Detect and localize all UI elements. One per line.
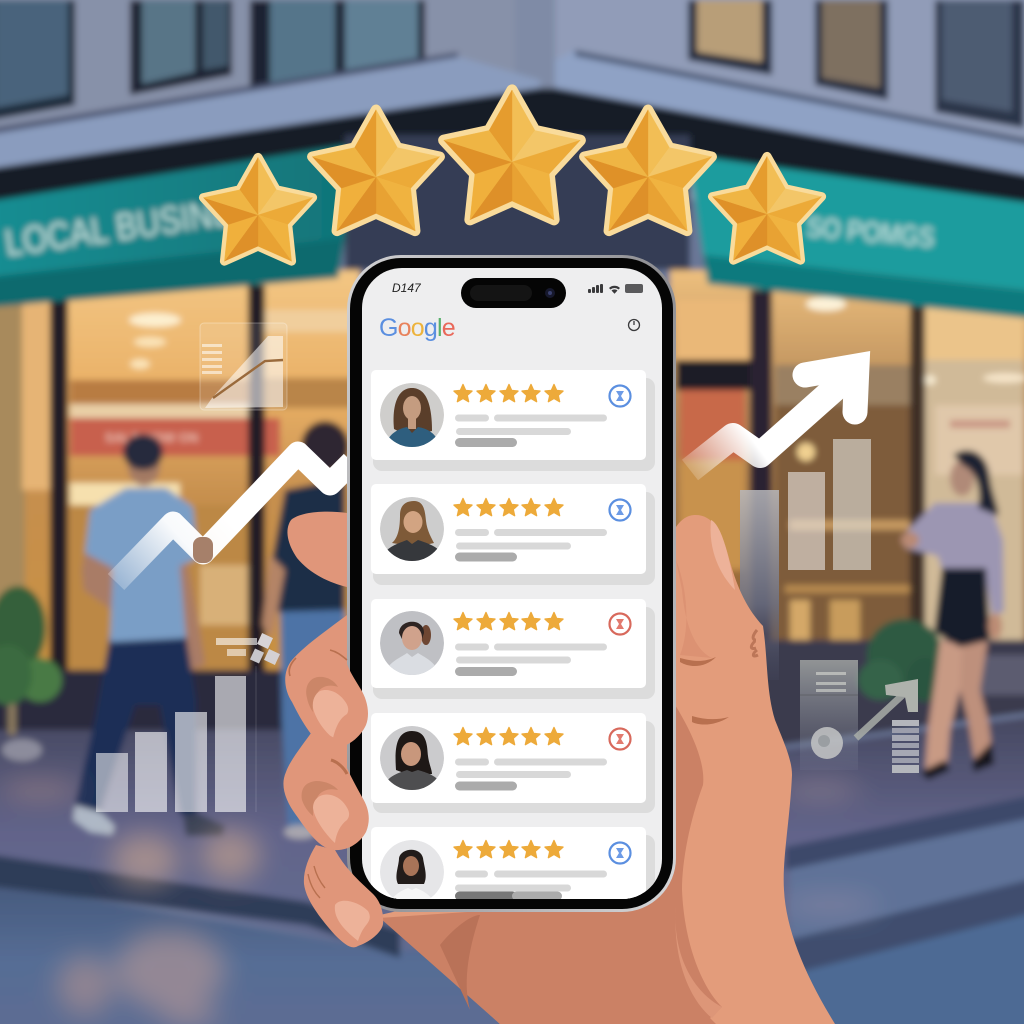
verified badge — [610, 500, 630, 520]
star 1 — [203, 157, 313, 261]
smartphone — [347, 255, 676, 928]
sidewalk light reflections — [0, 780, 880, 1024]
star 2 — [312, 110, 440, 231]
flagged badge — [610, 614, 630, 634]
person: man in blue shirt — [73, 434, 225, 836]
star 4 — [584, 110, 712, 231]
left bar chart — [96, 676, 246, 812]
cornices — [0, 50, 1024, 270]
phone body — [347, 255, 676, 912]
plant left — [0, 586, 62, 761]
person: woman walking — [901, 450, 1004, 780]
fingers over phone — [283, 512, 383, 947]
street — [0, 880, 1024, 1024]
right arrow head — [805, 366, 857, 412]
store left — [0, 270, 360, 685]
review card 4 — [371, 713, 655, 813]
avatar 1 — [380, 383, 444, 449]
awning left: LOCAL BUSINE — [2, 191, 236, 265]
right bar chart — [740, 439, 871, 680]
plant right — [858, 619, 943, 702]
flagged badge — [610, 728, 630, 750]
blurred storefront background: SALE NOW ON — [105, 430, 198, 445]
star 3 — [444, 90, 580, 220]
person: second pedestrian — [262, 421, 349, 839]
awning right — [688, 155, 1024, 320]
avatar 4 — [380, 726, 444, 792]
status icons — [588, 284, 643, 294]
google logo: Google — [379, 314, 455, 342]
building upper facade — [0, 0, 1024, 200]
right translucent analytics panel — [800, 660, 919, 773]
awning right: SO POMGS — [805, 211, 936, 253]
review card 1 — [371, 370, 655, 471]
small left analytics icon — [216, 633, 280, 812]
hand: palm and thumb — [380, 515, 835, 1024]
sidewalk — [0, 715, 1024, 950]
finger 3 — [283, 726, 369, 850]
review card 2 — [371, 484, 655, 585]
right growth arrow — [690, 368, 858, 470]
avatar 2 — [380, 497, 444, 563]
avatar 5 — [380, 840, 444, 899]
verified badge — [610, 842, 630, 864]
finger 2 — [285, 615, 368, 748]
five gold rating stars — [203, 90, 822, 261]
phone screen — [362, 268, 662, 928]
dynamic island — [461, 278, 566, 308]
status time: D147 — [392, 281, 422, 295]
curbs — [0, 853, 400, 958]
index finger — [287, 512, 347, 587]
header icon — [628, 320, 640, 330]
left translucent chart card — [200, 323, 287, 410]
finger 4 — [304, 845, 383, 947]
avatar 3 — [380, 611, 444, 677]
verified badge — [610, 386, 630, 406]
review card 5 — [371, 827, 655, 899]
review card 3 — [371, 599, 655, 699]
star 5 — [712, 156, 822, 260]
store right — [670, 270, 1024, 710]
awning left — [0, 145, 345, 308]
left growth arrow line — [116, 453, 352, 582]
